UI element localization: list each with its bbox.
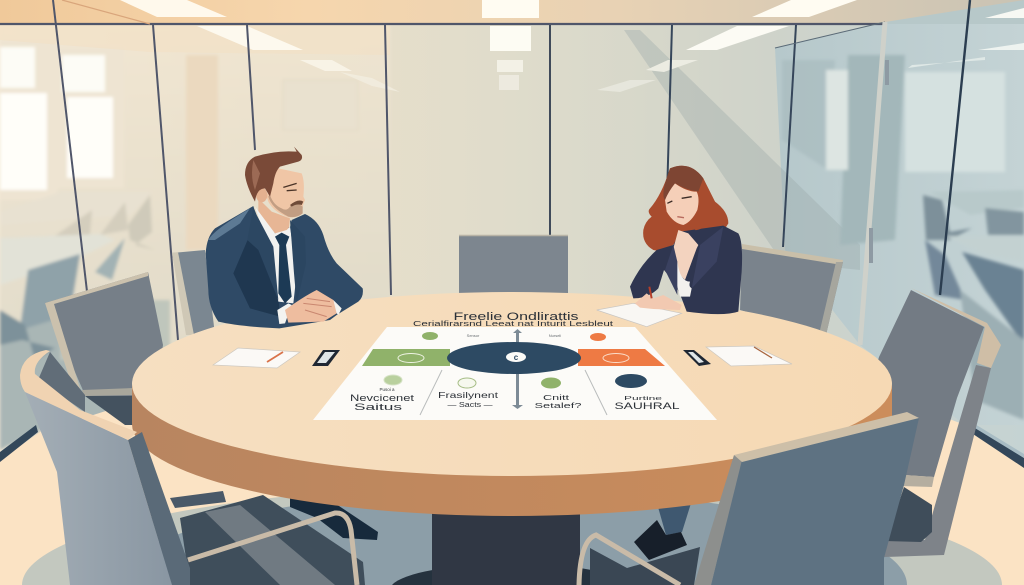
chair: right — [860, 288, 1001, 557]
document title — [413, 311, 613, 328]
front left chair: top rail — [20, 350, 137, 440]
woman: neck and chest — [673, 230, 698, 280]
man: hair highlight — [252, 160, 260, 190]
woman: notebook — [597, 303, 682, 327]
chair: back left small — [172, 250, 215, 335]
woman with notebook — [597, 166, 742, 327]
woman: hand — [635, 293, 682, 310]
front left chair: armrest — [188, 513, 357, 585]
front left chair: side band — [128, 432, 190, 585]
sheet: bottom labels: Frasilynent — [438, 391, 499, 400]
man in navy suit — [206, 147, 363, 328]
table: top — [132, 292, 892, 476]
woman: left lapel — [665, 245, 677, 295]
woman: hair top — [663, 166, 703, 200]
sheet: band icons — [398, 354, 629, 362]
man: moustache — [290, 201, 303, 207]
sheet: top icons and captions: Sensor — [467, 333, 480, 338]
sheet: bottom labels: Saitus — [354, 402, 402, 413]
man: legs and shoes — [290, 497, 378, 540]
woman: pen — [649, 287, 652, 298]
subtitle line: Cerialfirarsnd Leeat nat Inturit Lesbleut — [413, 321, 613, 328]
sheet: bottom labels: Nevcicenet — [350, 393, 414, 404]
right chair: side support — [884, 365, 991, 557]
sheet: top icons and captions: Nurseli — [549, 333, 561, 338]
ceiling — [0, 0, 1024, 92]
woman: legs and shoes — [634, 500, 692, 560]
chair: front right — [694, 412, 919, 585]
left glass room reflection — [0, 25, 390, 450]
right chair: frame — [911, 288, 1001, 368]
front left chair: inner back — [38, 352, 85, 412]
sheet: orange band — [578, 349, 665, 366]
right glass room reflection — [624, 0, 1024, 425]
man: left cuff — [277, 303, 292, 324]
right notepad and pen — [706, 346, 792, 366]
right phone — [683, 350, 711, 366]
sheet: bottom labels: Cnitt — [543, 393, 571, 402]
woman: lips — [677, 217, 684, 218]
sheet: dividers — [420, 370, 607, 415]
sheet: bottom labels: Purtine — [624, 396, 662, 402]
sheet: top icons and captions — [422, 332, 606, 341]
chair: back right — [740, 244, 843, 335]
front left chair: seat highlight — [205, 505, 335, 585]
front left chair: seat — [180, 495, 365, 585]
chair: left — [45, 272, 163, 425]
sheet: paper — [313, 327, 717, 420]
right chair: back — [860, 290, 984, 477]
right chair: seat — [886, 487, 932, 542]
chair: front left — [20, 350, 365, 585]
sheet: vertical arrow — [512, 329, 523, 409]
sheet: bottom labels: Setalef? — [534, 401, 582, 410]
table pedestal — [392, 500, 632, 585]
sheet: bottom labels — [350, 387, 680, 413]
front left chair: shell — [25, 392, 172, 585]
man: right lapel — [290, 220, 306, 303]
man: face — [267, 168, 305, 217]
sheet: bottom labels: Pusoi a — [379, 387, 395, 392]
sheet: bottom labels: — Sacts — — [448, 402, 492, 409]
title line: Freelie Ondlirattis — [454, 311, 579, 323]
glass wall mullions — [0, 0, 970, 345]
floor — [0, 400, 1024, 585]
man: tie — [275, 233, 292, 303]
sheet: bottom icons — [384, 374, 647, 388]
woman: right lapel — [692, 227, 723, 288]
chair: back centre — [459, 236, 568, 294]
sheet: central disc — [447, 342, 581, 374]
man: ear — [256, 188, 267, 202]
table: edge — [132, 385, 892, 516]
woman: side hair — [695, 178, 715, 230]
sheet: green band — [362, 349, 450, 366]
chair: front right armrest — [579, 535, 700, 585]
man: left lapel — [247, 207, 278, 300]
man: right cuff — [333, 300, 342, 315]
front left chair: lower arm — [170, 491, 226, 508]
woman: blazer — [630, 226, 742, 314]
sheet: bottom labels: SAUHRAL — [614, 401, 680, 412]
woman: eyes — [667, 197, 692, 203]
man: shoulder highlight — [208, 208, 250, 240]
woman: face — [665, 183, 699, 225]
man: fingers — [303, 298, 332, 317]
man: jacket — [206, 206, 363, 328]
man: beard — [268, 195, 303, 217]
woman: blouse — [675, 262, 692, 297]
man: brow and eye — [283, 183, 297, 191]
man: hair — [245, 147, 302, 202]
left notepad and pen — [213, 348, 300, 368]
man: hands — [285, 290, 337, 323]
sheet: central icon — [506, 352, 526, 362]
man: jacket shading — [233, 227, 280, 317]
infographic sheet on table — [313, 327, 717, 420]
sheet: central icon: c — [514, 353, 519, 362]
left phone — [312, 350, 340, 366]
round table — [132, 292, 892, 516]
woman: hair back — [643, 166, 728, 251]
man: neck — [258, 198, 290, 233]
man: shirt — [255, 207, 297, 303]
right chair: strip — [901, 475, 934, 487]
